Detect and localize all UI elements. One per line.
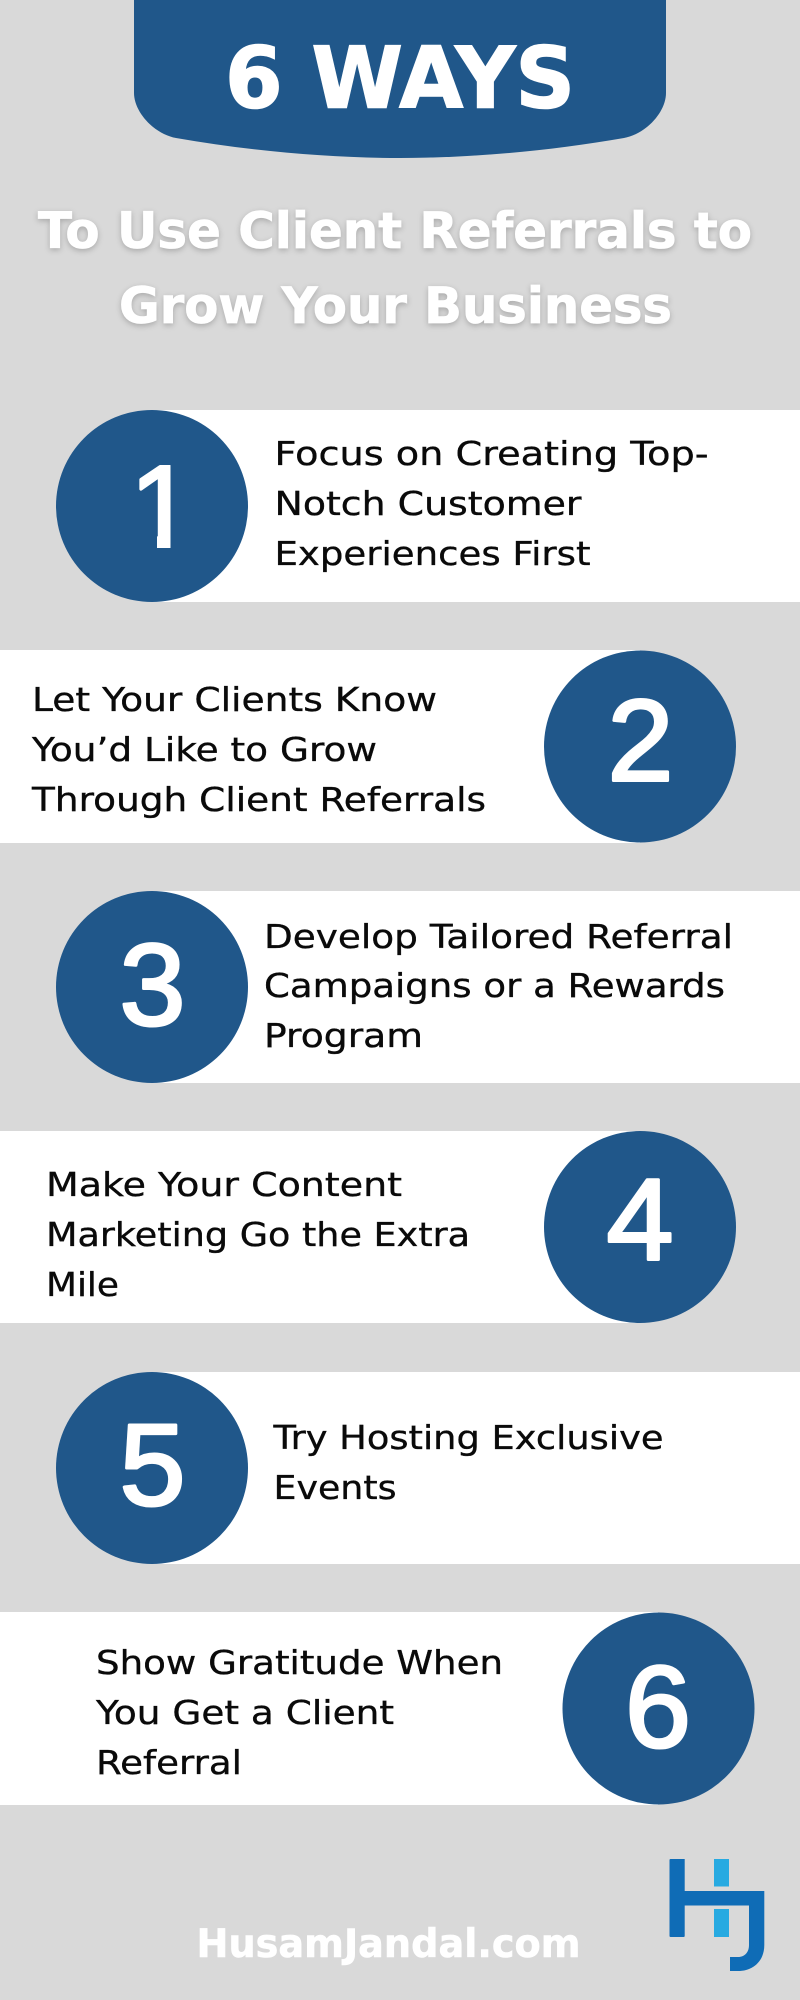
number badge 4: [544, 1131, 736, 1323]
footer website: HusamJandal.com: [196, 1922, 580, 1967]
step 6 text: [95, 1643, 503, 1782]
number badge 5: 5: [120, 1400, 186, 1530]
number badge 1: [56, 410, 248, 602]
step 1 text: Experiences First: [274, 534, 591, 573]
header banner: [134, 0, 666, 158]
step 3 text: Campaigns or a Rewards: [264, 966, 725, 1005]
step 3 text: Program: [264, 1016, 423, 1055]
step 3 text: Develop Tailored Referral: [264, 917, 733, 956]
number badge 2: 2: [608, 676, 674, 806]
step 2 text: You’d Like to Grow: [31, 730, 377, 769]
panel: step 1: [56, 410, 800, 602]
number badge 3: 3: [120, 920, 186, 1050]
title: 6 WAYS: [225, 30, 575, 128]
step 6 text: You Get a Client: [95, 1693, 394, 1732]
number badge 1: 1: [130, 442, 196, 572]
step 1 text: [274, 434, 708, 573]
step 4 text: Make Your Content: [46, 1165, 402, 1204]
panel: step 5: [56, 1372, 800, 1564]
step 6 text: Show Gratitude When: [96, 1643, 503, 1682]
number badge 6: 6: [625, 1642, 691, 1772]
step 2 text: Through Client Referrals: [31, 780, 486, 819]
step 2 text: Let Your Clients Know: [32, 680, 437, 719]
number badge 5: [56, 1372, 248, 1564]
number badge 6: [562, 1612, 754, 1804]
step 1 text: Notch Customer: [274, 484, 582, 523]
number badge 4: 4: [606, 1154, 674, 1284]
step 6 text: Referral: [96, 1743, 242, 1782]
step 5 text: Events: [274, 1468, 396, 1507]
number badge 2: [544, 650, 736, 842]
step 5 text: [272, 1418, 664, 1507]
step 4 text: Mile: [46, 1265, 119, 1304]
panel: step 6: [0, 1612, 754, 1805]
step 1 text: Focus on Creating Top-: [274, 434, 708, 473]
step 4 text: [46, 1165, 470, 1304]
number badge 3: [56, 891, 248, 1083]
step 2 text: [31, 680, 486, 819]
panel: step 4: [0, 1131, 736, 1323]
step 5 text: Try Hosting Exclusive: [272, 1418, 664, 1457]
step 4 text: Marketing Go the Extra: [46, 1215, 470, 1254]
subtitle: To Use Client Referrals to: [38, 202, 752, 260]
subtitle: [38, 202, 752, 335]
panel: step 3: [56, 891, 800, 1083]
step 3 text: [264, 917, 733, 1055]
panel: step 2: [0, 650, 736, 843]
subtitle: Grow Your Business: [119, 277, 672, 335]
icon: HJ logo: [670, 1859, 764, 1971]
